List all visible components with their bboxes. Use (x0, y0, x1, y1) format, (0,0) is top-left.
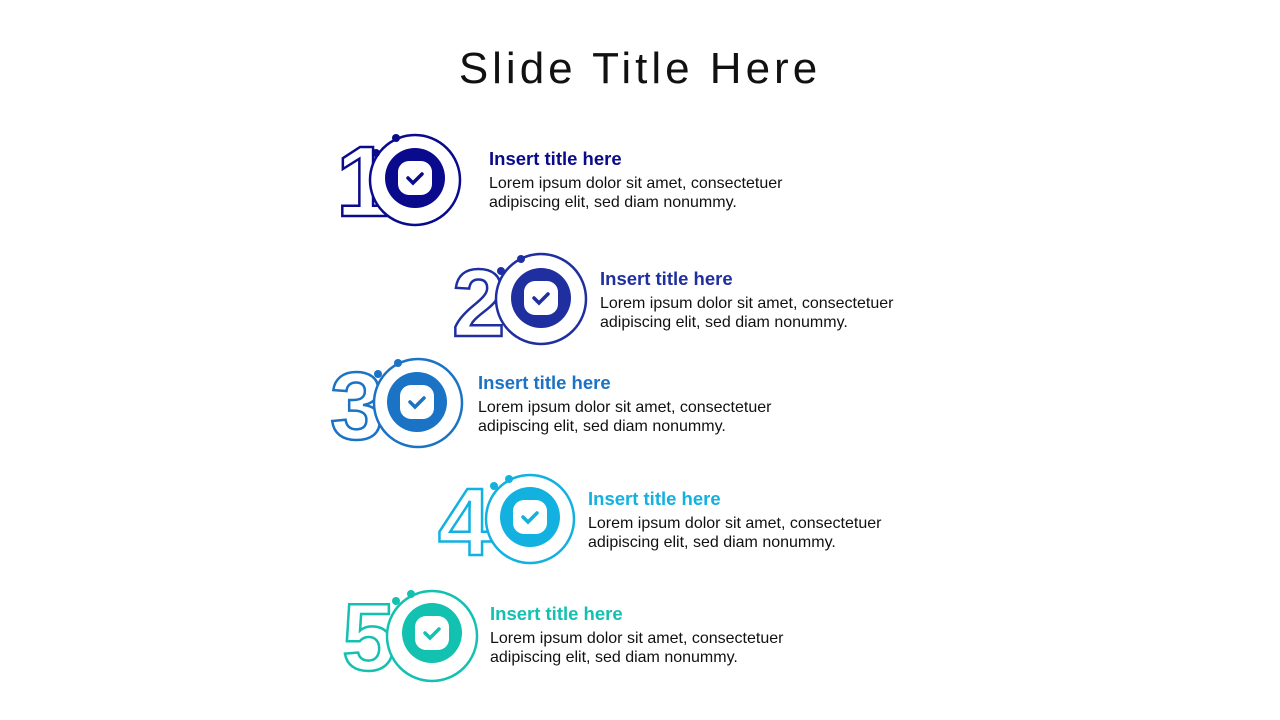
text block 3: adipiscing elit, sed diam nonummy. (478, 418, 726, 435)
text block 3: Lorem ipsum dolor sit amet, consectetuer (478, 399, 771, 416)
icon: 20: 2 (452, 250, 505, 357)
text block 5: Lorem ipsum dolor sit amet, consectetuer (490, 630, 783, 647)
icon: 30 (330, 353, 462, 460)
icon: 40 (438, 469, 574, 576)
text block 2: Lorem ipsum dolor sit amet, consectetuer (600, 295, 893, 312)
text block 1: Lorem ipsum dolor sit amet, consectetuer (489, 175, 782, 192)
text block 4: adipiscing elit, sed diam nonummy. (588, 534, 836, 551)
text block 2: adipiscing elit, sed diam nonummy. (600, 314, 848, 331)
text block 1: Insert title here (489, 148, 622, 169)
text block 1: adipiscing elit, sed diam nonummy. (489, 194, 737, 211)
icon: 10: 1 (336, 126, 392, 238)
text block 4: Lorem ipsum dolor sit amet, consectetuer (588, 515, 881, 532)
icon: 30: 3 (330, 353, 383, 460)
text block 2 (600, 268, 894, 331)
text block 3: Insert title here (478, 372, 611, 393)
title: Slide Title Here (459, 44, 821, 93)
text block 1 (489, 148, 782, 211)
text block 5 (490, 603, 784, 666)
text block 4: Insert title here (588, 488, 721, 509)
icon: 10 (336, 126, 460, 238)
icon: 20 (452, 250, 586, 357)
text block 2: Insert title here (600, 268, 733, 289)
icon: 50 (342, 584, 477, 691)
text block 5: Insert title here (490, 603, 623, 624)
icon: 40: 4 (438, 469, 491, 576)
text block 5: adipiscing elit, sed diam nonummy. (490, 649, 738, 666)
text block 3 (478, 372, 772, 435)
text block 4 (588, 488, 882, 551)
icon: 50: 5 (342, 584, 395, 691)
